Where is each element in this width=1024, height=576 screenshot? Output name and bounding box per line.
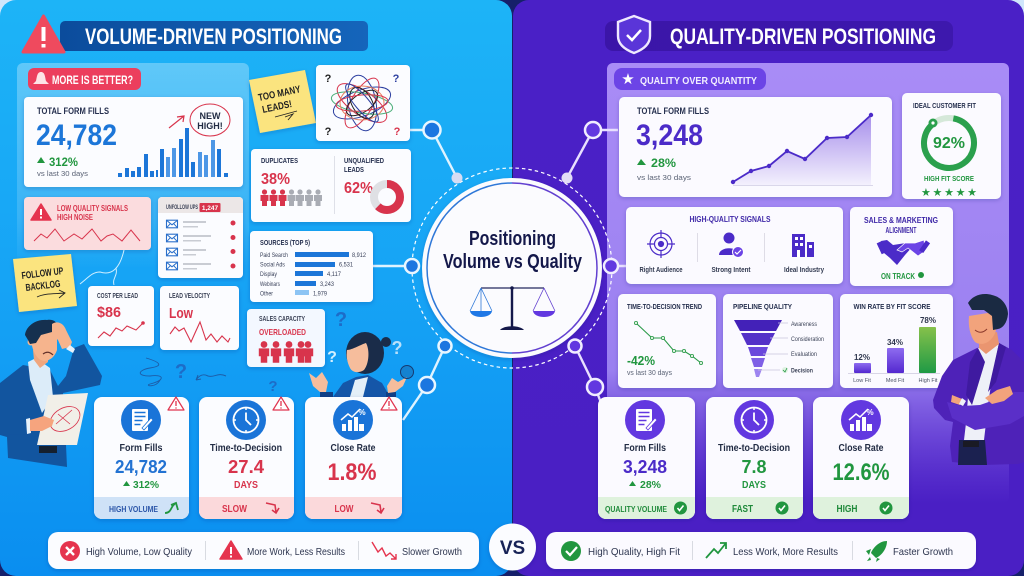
callout: quality over quantity: ★ — [621, 71, 635, 88]
panel: time-to-decision trend: TIME-TO-DECISION TREND — [627, 304, 702, 311]
badge: vs: VS — [500, 538, 525, 559]
sticky note: too many leads: TOO MANY — [257, 84, 302, 104]
panel: duplicates and unqualified leads: LEADS — [344, 165, 364, 174]
heading: quality-driven positioning: QUALITY-DRIVEN POSITIONING — [670, 24, 936, 49]
heading: quality-driven positioning — [605, 16, 953, 53]
bar chart: win rate — [848, 316, 940, 384]
panel: sources top 5: 4,117 — [327, 272, 342, 278]
bar chart: win rate: 34% — [887, 338, 903, 347]
panel: total form fills (volume): TOTAL FORM FILLS — [37, 106, 109, 116]
panel: sources top 5: Webinars — [260, 282, 280, 288]
summary strip: volume: More Work, Less Results — [247, 546, 345, 558]
panel: sales and marketing alignment: ALIGNMENT — [886, 226, 917, 235]
panel: sources top 5: Other — [260, 292, 273, 298]
page corners backdrop — [0, 0, 1024, 24]
callout: quality over quantity: QUALITY OVER QUANTITY — [640, 75, 757, 87]
kpi card: form fills (quality): 3,248 — [623, 457, 667, 477]
heading: volume-driven positioning: VOLUME-DRIVEN POSITIONING — [85, 24, 342, 49]
panel: sales and marketing alignment — [850, 207, 953, 286]
panel: total form fills (volume): 24,782 — [36, 119, 117, 152]
scribble and question marks: ? — [327, 349, 337, 366]
kpi card: form fills (volume): 312% — [133, 479, 160, 491]
scribble and question marks: ? — [335, 309, 347, 331]
panel: total form fills (quality): TOTAL FORM FILLS — [637, 106, 709, 116]
panel: low quality signals — [24, 197, 151, 250]
callout: new high: HIGH! — [197, 121, 223, 131]
panel: sales and marketing alignment: ON TRACK — [881, 272, 915, 281]
panel: total form fills (quality): 28% — [651, 156, 676, 170]
bar chart: sources — [295, 252, 349, 295]
kpi card: time-to-decision (quality) — [706, 397, 803, 519]
panel: sources top 5: 3,243 — [320, 282, 335, 288]
sticky note: follow up backlog — [13, 254, 77, 312]
panel: tangled scribble: ? — [393, 73, 400, 85]
kpi card: close rate (volume): Close Rate — [330, 443, 376, 454]
summary strip: quality: Faster Growth — [893, 546, 953, 558]
panel: sources top 5: Display — [260, 272, 277, 278]
panel: time-to-decision trend — [618, 294, 716, 388]
panel: sources top 5: 6,531 — [339, 262, 354, 268]
scribble and question marks — [140, 309, 402, 395]
kpi card: time-to-decision (volume): DAYS — [234, 480, 258, 491]
icon: envelopes — [166, 220, 178, 270]
panel: ideal customer fit — [902, 93, 1001, 199]
callout: new high: NEW — [200, 111, 221, 121]
kpi card: form fills (quality): Form Fills — [624, 443, 666, 454]
panel: high-quality signals: Strong Intent — [712, 267, 751, 274]
illustration: confused woman — [309, 332, 414, 397]
bar chart: win rate: Low Fit — [853, 378, 871, 384]
panel: duplicates and unqualified leads: DUPLICATES — [261, 156, 298, 165]
kpi card: time-to-decision (quality): FAST — [732, 504, 753, 515]
panel: sales capacity — [247, 309, 325, 367]
summary strip: volume: Slower Growth — [402, 546, 462, 558]
panel: low quality signals: HIGH NOISE — [57, 213, 94, 222]
callout: quality over quantity — [614, 68, 766, 90]
summary strip: quality: Less Work, More Results — [733, 546, 838, 558]
panel: pipeline quality: Awareness — [791, 322, 817, 328]
icon: people row — [260, 189, 322, 206]
chart: unqualified donut — [374, 184, 400, 210]
scribble and question marks: ? — [175, 361, 187, 383]
summary strip: quality — [546, 532, 976, 569]
kpi card: form fills (quality) — [598, 397, 695, 519]
panel: volume content backdrop — [17, 63, 249, 268]
panel: sources top 5: SOURCES (TOP 5) — [260, 238, 310, 247]
bar chart: win rate: 78% — [920, 316, 936, 325]
kpi card: time-to-decision (quality): DAYS — [742, 480, 766, 491]
sticky note: too many leads — [249, 70, 316, 133]
icon: right audience target — [647, 230, 675, 258]
panel: quality-driven background — [513, 0, 1024, 576]
chart: 92% ring: 92% — [933, 135, 965, 152]
panel: high-quality signals — [626, 207, 843, 284]
panel: lead velocity: Low — [169, 305, 193, 322]
summary strip: quality: High Quality, High Fit — [588, 546, 680, 558]
panel: high-quality signals: Ideal Industry — [784, 267, 824, 274]
summary strip: volume — [48, 532, 479, 569]
panel: cost per lead: COST PER LEAD — [97, 293, 138, 300]
icon: ideal industry building — [792, 234, 814, 257]
panel: high-quality signals: Right Audience — [640, 267, 683, 274]
panel: sales capacity: OVERLOADED — [259, 327, 306, 337]
panel: pipeline quality: Consideration — [791, 337, 824, 343]
kpi card: time-to-decision (quality): Time-to-Decision — [718, 443, 790, 454]
panel: sales and marketing alignment: SALES & MARKETING — [864, 216, 938, 225]
panel: pipeline quality — [723, 294, 833, 388]
callout: more is better: MORE IS BETTER? — [52, 75, 133, 87]
illustration: stressed man — [0, 320, 102, 467]
panel: tangled scribble: ? — [325, 126, 332, 138]
panel: unfollowed leads inbox: 1,247 — [202, 205, 219, 212]
callout: more is better — [28, 68, 141, 90]
illustration: confident man — [933, 294, 1024, 465]
panel: duplicates and unqualified leads: 62% — [344, 180, 373, 197]
panel: cost per lead — [88, 286, 154, 346]
panel: unfollowed leads inbox — [158, 197, 243, 278]
panel: duplicates and unqualified leads: 38% — [261, 171, 290, 188]
panel: unfollowed leads inbox: UNFOLLOW UPS — [166, 204, 198, 211]
panel: time-to-decision trend: -42% — [627, 353, 655, 368]
kpi card: close rate (quality) — [813, 397, 909, 519]
kpi card: close rate (quality): HIGH — [836, 504, 858, 515]
kpi card: form fills (quality): QUALITY VOLUME — [605, 505, 668, 514]
panel: lead velocity: LEAD VELOCITY — [169, 293, 210, 300]
kpi card: form fills (volume) — [94, 397, 189, 519]
panel: tangled scribble: ? — [394, 126, 401, 138]
panel: total form fills (volume): 312% — [49, 155, 78, 169]
scribble and question marks: ? — [268, 378, 278, 395]
panel: time-to-decision trend: vs last 30 days — [627, 370, 672, 377]
arrows: noise to follow up backlog — [80, 250, 124, 285]
panel: tangled scribble — [316, 65, 410, 141]
panel: high-quality signals: HIGH-QUALITY SIGNALS — [690, 215, 771, 224]
network connectors — [373, 130, 626, 420]
panel: volume-driven background — [0, 0, 512, 576]
kpi card: form fills (volume): HIGH VOLUME — [109, 505, 159, 514]
panel: win rate by fit score: WIN RATE BY FIT SCORE — [854, 302, 930, 311]
heading: volume-driven positioning — [23, 16, 368, 52]
badge: vs — [489, 524, 536, 570]
panel: sources top 5: 1,979 — [313, 292, 328, 298]
panel: sources top 5 — [250, 231, 373, 302]
panel: total form fills (quality) — [619, 97, 892, 197]
center hub: positioning volume vs quality — [412, 168, 612, 368]
panel: total form fills (quality): 3,248 — [636, 119, 703, 152]
panel: tangled scribble: ? — [325, 73, 332, 85]
kpi card: time-to-decision (volume): 27.4 — [228, 457, 264, 477]
kpi card: time-to-decision (volume): SLOW — [222, 504, 247, 515]
icon: balance scale — [470, 286, 555, 330]
panel: sales capacity: SALES CAPACITY — [259, 316, 305, 323]
panel: win rate by fit score — [840, 294, 953, 388]
sticky note: follow up backlog: FOLLOW UP — [21, 266, 64, 282]
kpi card: form fills (volume): Form Fills — [120, 443, 163, 454]
panel: ideal customer fit: IDEAL CUSTOMER FIT — [913, 103, 977, 110]
panel: duplicates and unqualified leads: UNQUALIFIED — [344, 156, 384, 165]
kpi card: close rate (quality): Close Rate — [838, 443, 884, 454]
kpi card: form fills (quality): 28% — [640, 479, 662, 491]
panel: duplicates and unqualified leads — [251, 149, 411, 222]
chart: funnel — [734, 320, 782, 377]
summary strip: volume: High Volume, Low Quality — [86, 546, 193, 558]
panel: total form fills (volume) — [24, 97, 243, 187]
panel: quality content backdrop — [607, 63, 1009, 503]
sticky note: follow up backlog: BACKLOG — [25, 279, 61, 294]
panel: lead velocity — [160, 286, 239, 350]
panel: total form fills (volume): vs last 30 days — [37, 169, 88, 178]
kpi card: time-to-decision (quality): 7.8 — [742, 457, 766, 477]
line chart: form fills growth — [731, 113, 873, 186]
panel: sources top 5: 8,912 — [352, 253, 367, 259]
icon: handshake — [877, 240, 930, 265]
panel: ideal customer fit: HIGH FIT SCORE — [924, 174, 974, 183]
bar chart: form fills — [118, 128, 228, 177]
callout: new high — [169, 104, 230, 136]
line chart: decreasing trend — [634, 321, 703, 365]
kpi card: form fills (volume): 24,782 — [115, 457, 167, 477]
bar chart: win rate: High Fit — [919, 378, 938, 384]
center hub: positioning volume vs quality: Volume vs Quality — [443, 251, 583, 273]
panel: ideal customer fit: ★★★★★ — [921, 187, 977, 199]
kpi card: close rate (volume): 1.8% — [328, 459, 376, 486]
sticky note: too many leads: LEADS! — [261, 99, 293, 116]
panel: cost per lead: $86 — [97, 304, 121, 321]
bar chart: win rate: 12% — [854, 353, 870, 362]
panel: sources top 5: Social Ads — [260, 262, 285, 268]
kpi card: close rate (volume) — [305, 397, 402, 519]
icon: overloaded team — [259, 341, 313, 363]
connector nodes — [405, 122, 618, 395]
panel: low quality signals: LOW QUALITY SIGNALS — [57, 204, 128, 213]
kpi card: close rate (volume): LOW — [334, 504, 354, 515]
kpi card: time-to-decision (volume) — [199, 397, 294, 519]
center hub: positioning volume vs quality: Positioning — [469, 228, 556, 250]
kpi card: time-to-decision (volume): Time-to-Decision — [210, 443, 282, 454]
bar chart: win rate: Med Fit — [886, 378, 905, 384]
icon: strong intent person — [719, 232, 744, 258]
kpi card: close rate (quality): 12.6% — [832, 459, 890, 486]
panel: sources top 5: Paid Search — [260, 253, 288, 259]
panel: pipeline quality: Evaluation — [791, 352, 817, 358]
panel: pipeline quality: Decision — [791, 368, 813, 374]
panel: pipeline quality: PIPELINE QUALITY — [733, 302, 792, 311]
panel: total form fills (quality): vs last 30 days — [637, 173, 691, 182]
scribble and question marks: ? — [392, 338, 402, 358]
